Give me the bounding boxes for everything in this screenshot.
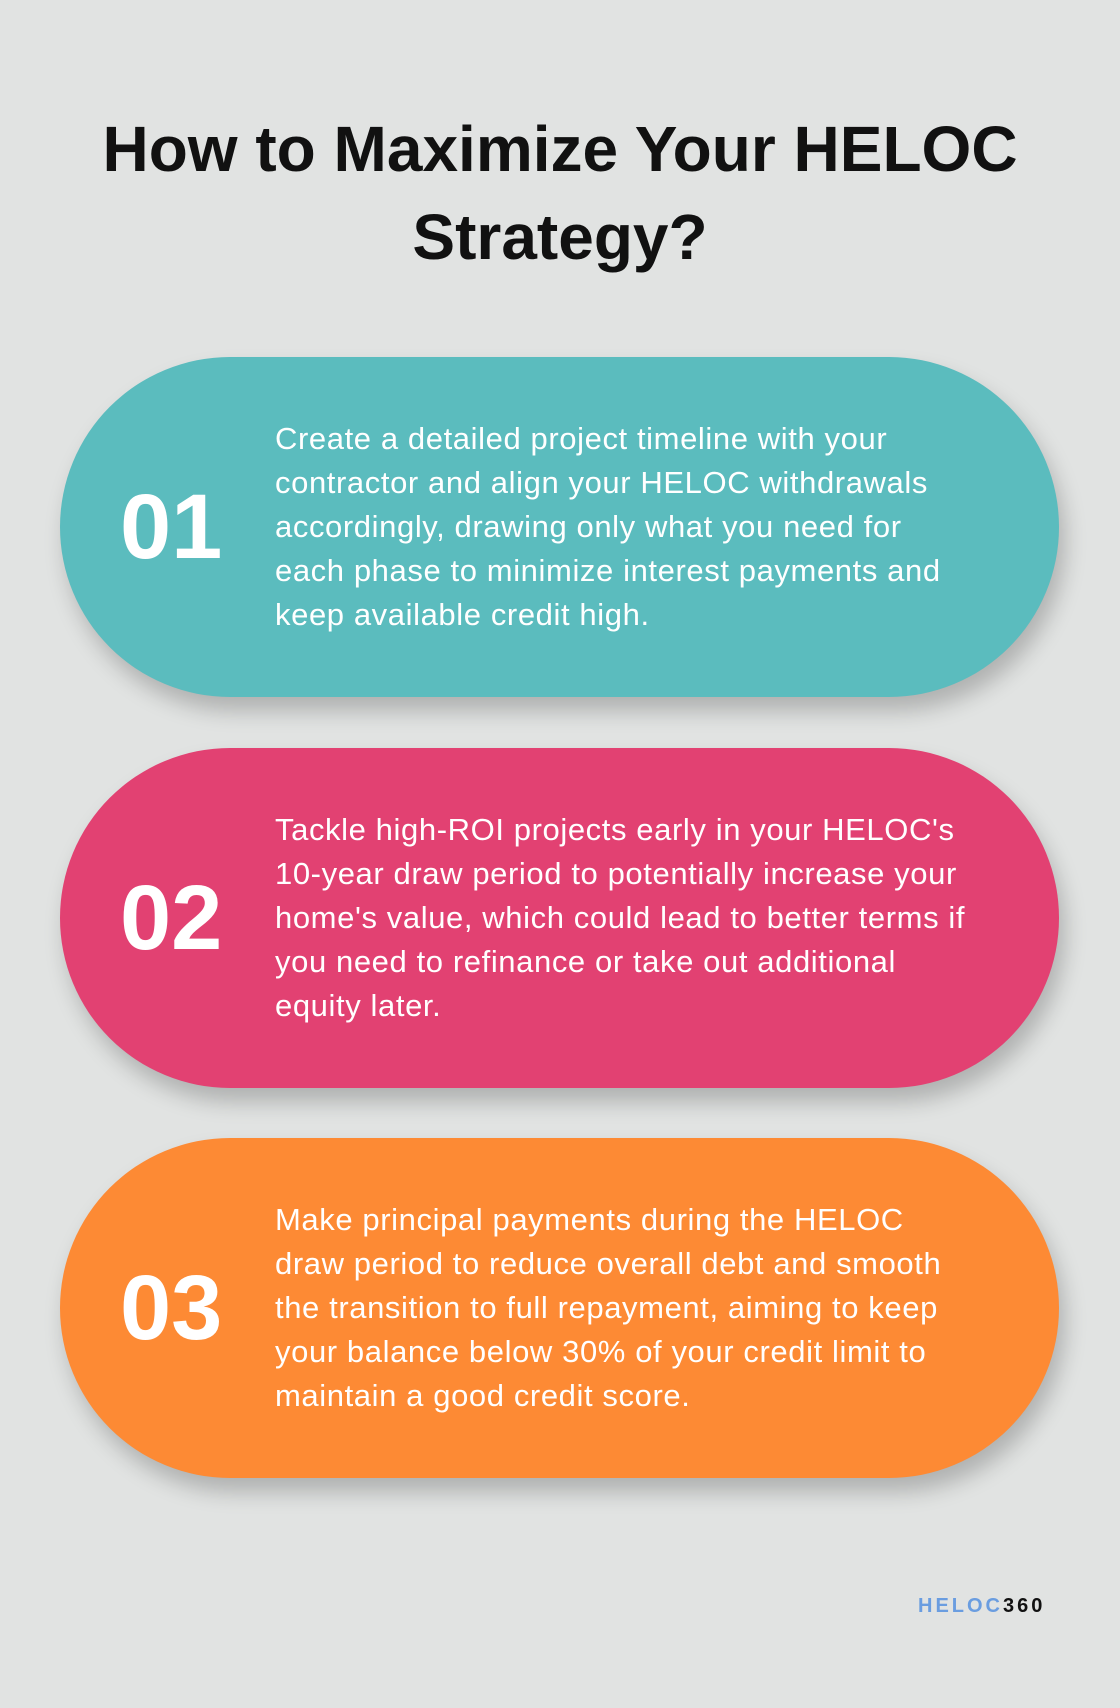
text 01: each phase to minimize interest payments and: [275, 553, 941, 588]
text 03: Make principal payments during the HELOC: [275, 1202, 904, 1237]
number 02: 02: [120, 867, 222, 969]
text 02: equity later.: [275, 988, 441, 1023]
text 02: Tackle high-ROI projects early in your HELOC's: [275, 812, 955, 847]
title: Strategy?: [412, 201, 708, 273]
text 03: [275, 1202, 941, 1413]
logo: HELOC360: [918, 1595, 1045, 1617]
text 01: [275, 421, 941, 632]
text 03: maintain a good credit score.: [275, 1378, 690, 1413]
text 02: 10-year draw period to potentially increase your: [275, 856, 957, 891]
text 01: Create a detailed project timeline with your: [275, 421, 887, 456]
text 02: you need to refinance or take out additional: [275, 944, 896, 979]
text 02: home's value, which could lead to better terms if: [275, 900, 965, 935]
text 01: accordingly, drawing only what you need for: [275, 509, 902, 544]
text 03: draw period to reduce overall debt and smooth: [275, 1246, 941, 1281]
text 01: keep available credit high.: [275, 597, 650, 632]
panel: step 03: [60, 1138, 1059, 1478]
number 03: 03: [120, 1257, 222, 1359]
title: How to Maximize Your HELOC: [102, 113, 1018, 185]
text 01: contractor and align your HELOC withdrawals: [275, 465, 928, 500]
text 02: [275, 812, 965, 1023]
text 03: your balance below 30% of your credit limit to: [275, 1334, 926, 1369]
text 03: the transition to full repayment, aiming to keep: [275, 1290, 938, 1325]
title: [102, 113, 1018, 273]
panel: step 01: [60, 357, 1059, 697]
number 01: 01: [120, 476, 222, 578]
panel: step 02: [60, 748, 1059, 1088]
